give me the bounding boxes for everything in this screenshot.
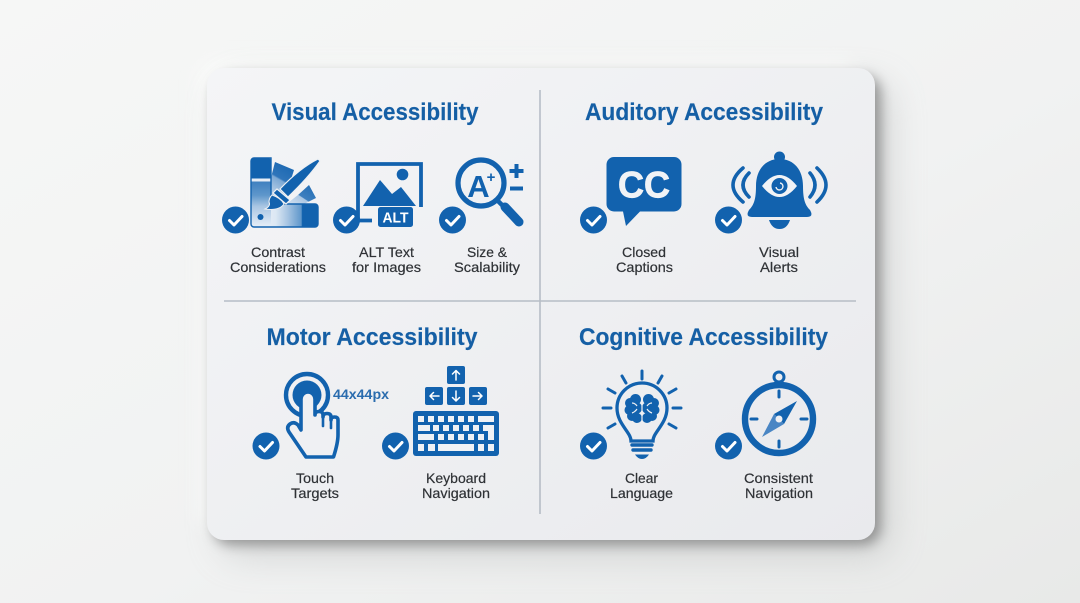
label: size and scalability: Size & — [467, 244, 508, 260]
card wide shadow — [222, 84, 890, 556]
icon: colour swatch fan and paintbrush — [251, 158, 320, 227]
label: closed captions: Captions — [616, 259, 673, 275]
check: consistent navigation — [715, 432, 742, 460]
label: clear language: Language — [610, 485, 673, 501]
label: closed captions: Closed — [622, 244, 666, 260]
label: contrast considerations: Contrast — [251, 244, 305, 260]
icon: magnifier with A plus: + — [487, 169, 496, 186]
label: touch targets: Targets — [291, 485, 339, 501]
label: alt text for images: for Images — [352, 259, 421, 275]
check: keyboard navigation — [382, 432, 409, 460]
icon: arrow keys and keyboard — [413, 366, 499, 456]
label: size and scalability: Scalability — [454, 259, 520, 275]
label: touch targets: Touch — [296, 470, 334, 486]
icon: magnifier with A plus — [458, 160, 524, 222]
icon: compass — [745, 372, 813, 453]
icon: image with alt tag — [358, 164, 421, 227]
label: visual alerts — [759, 244, 799, 275]
check: touch targets — [252, 432, 280, 460]
icon: bell with eye — [733, 152, 826, 229]
label: alt text for images — [352, 244, 421, 275]
card near shadow — [213, 75, 881, 545]
panel: cognitive accessibility — [579, 324, 829, 501]
heading: visual accessibility: Visual Accessibility — [272, 99, 479, 126]
card highlight — [198, 60, 858, 530]
label: size and scalability — [454, 244, 520, 275]
label: consistent navigation — [744, 470, 813, 501]
label: alt text for images: ALT Text — [359, 244, 414, 260]
check: contrast — [222, 206, 249, 234]
label: keyboard navigation: Navigation — [422, 485, 490, 501]
label: keyboard navigation: Keyboard — [426, 470, 486, 486]
icon: closed captions bubble: CC — [618, 164, 670, 206]
check: alt text — [333, 206, 360, 234]
label: clear language — [610, 470, 673, 501]
label: keyboard navigation — [422, 470, 490, 501]
label: clear language: Clear — [625, 470, 658, 486]
check: visual alerts — [715, 206, 742, 234]
label: visual alerts: Alerts — [760, 259, 798, 275]
check: clear language — [580, 432, 607, 460]
card — [207, 68, 875, 540]
check: size — [439, 206, 466, 234]
icon: closed captions bubble — [606, 157, 682, 226]
panel: visual accessibility — [222, 99, 524, 275]
icon: image with alt tag: ALT — [382, 210, 409, 226]
heading: cognitive accessibility: Cognitive Accessibility — [579, 324, 829, 351]
heading: auditory accessibility: Auditory Accessibility — [585, 99, 824, 126]
icon: touch target hand — [286, 374, 338, 457]
label: contrast considerations: Considerations — [230, 259, 326, 275]
label: closed captions — [616, 244, 673, 275]
heading: motor accessibility: Motor Accessibility — [266, 324, 478, 351]
icon: magnifier with A plus: A — [467, 169, 490, 204]
panel: auditory accessibility — [580, 99, 826, 275]
icon: light bulb with brain — [603, 371, 681, 459]
panel: motor accessibility — [252, 324, 499, 501]
label: visual alerts: Visual — [759, 244, 799, 260]
label: consistent navigation: Navigation — [745, 485, 813, 501]
label: touch targets — [291, 470, 339, 501]
label: contrast considerations — [230, 244, 326, 275]
check: closed captions — [580, 206, 607, 234]
label: consistent navigation: Consistent — [744, 470, 813, 486]
target size label: 44x44px — [333, 387, 390, 402]
